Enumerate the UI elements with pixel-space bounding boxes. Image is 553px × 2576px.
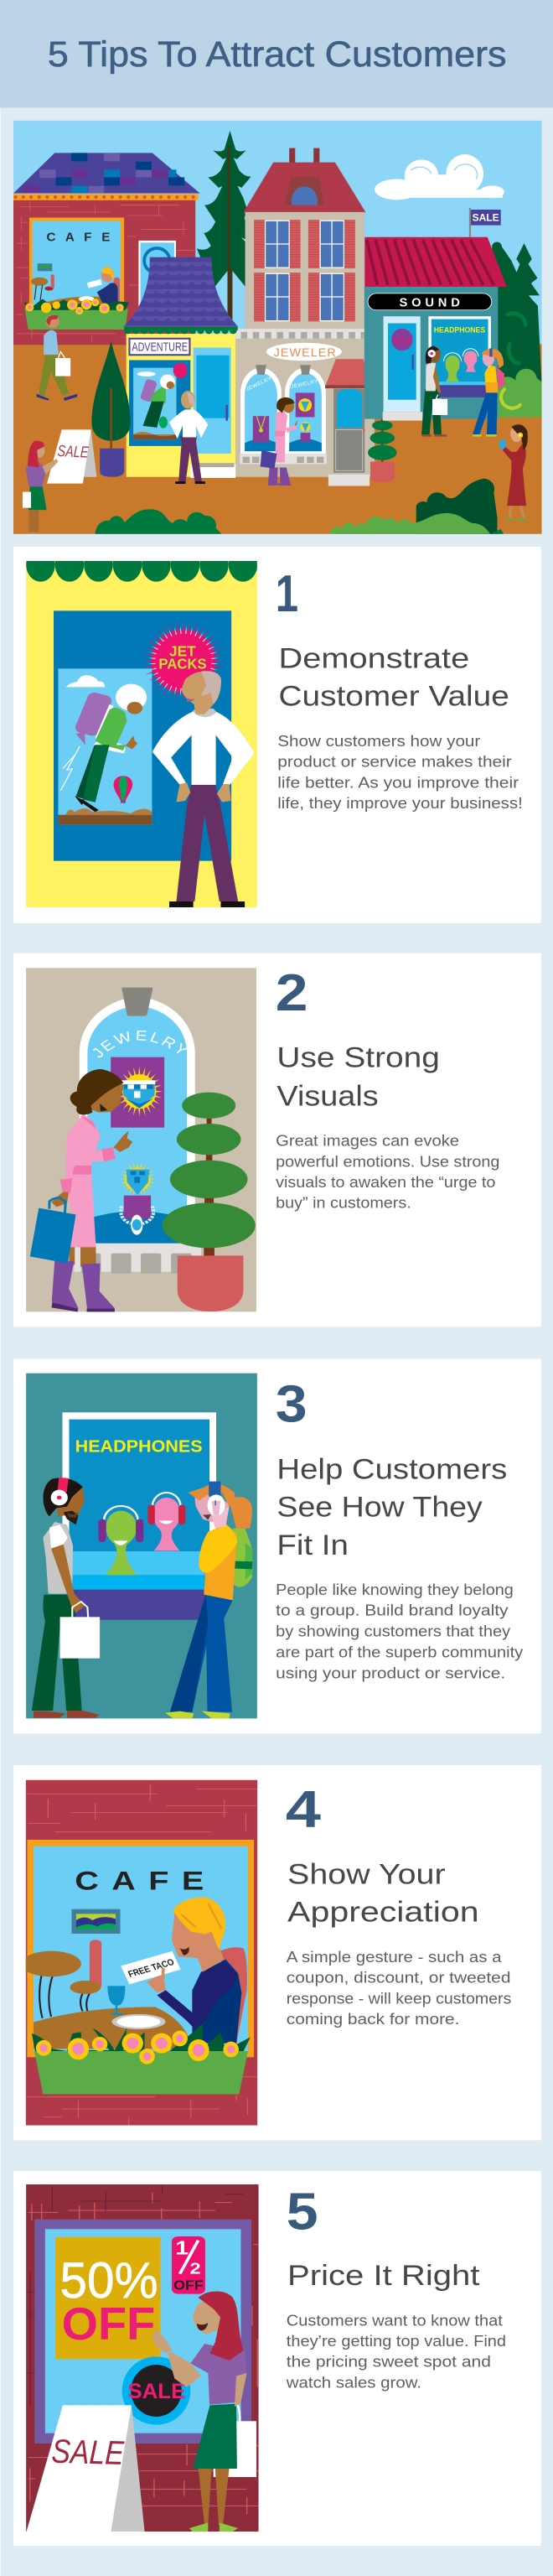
skirt: [193, 2404, 237, 2469]
upper windows: [254, 220, 355, 321]
heading: [276, 1453, 507, 1561]
panel 1: demonstrate customer value: [13, 547, 541, 923]
arm: [51, 1545, 85, 1613]
step number: 5: [287, 2182, 318, 2241]
top: [190, 2344, 247, 2405]
woman in red dress: [499, 424, 528, 521]
heading: Visuals: [276, 1080, 379, 1112]
flowers: [25, 299, 124, 314]
green mannequin: [98, 1506, 143, 1575]
woman in pink: [30, 1069, 132, 1311]
card: [13, 1765, 541, 2140]
table and chairs: [21, 1940, 101, 2018]
chair back: [220, 1947, 247, 2049]
gem burst poster: [116, 1067, 163, 1117]
jeweler storefront: JEWELER: [274, 346, 336, 360]
cafe roof: [13, 153, 200, 193]
body text: Show customers how your: [277, 732, 480, 750]
flag: [469, 208, 501, 237]
body text: [286, 2312, 506, 2392]
red townhouse: [243, 148, 365, 332]
curved jewelry label: JEWELRY: [92, 1030, 187, 1058]
trousers: [176, 784, 238, 901]
blue window: [54, 610, 231, 861]
body text: by showing customers that they: [276, 1623, 510, 1640]
jetpack man: [74, 684, 147, 812]
pink mannequin: [147, 1493, 185, 1550]
body text: buy” in customers.: [276, 1194, 411, 1212]
body text: coupon, discount, or tweeted: [287, 1969, 510, 1987]
window: [428, 316, 491, 384]
bag: [214, 2421, 256, 2477]
framed picture: [71, 1909, 121, 1934]
illustration: adventure window: [26, 548, 257, 907]
diner in window: [87, 267, 120, 306]
body text: life better. As you improve their: [277, 774, 519, 792]
heading: Fit In: [276, 1529, 349, 1561]
body text: People like knowing they belong: [276, 1581, 514, 1598]
man looking at window: [169, 391, 208, 484]
coupon: FREE TACO: [127, 1956, 176, 1980]
window frame: [34, 2220, 251, 2444]
heading: [287, 1858, 479, 1929]
flag: SALE: [473, 212, 499, 224]
body text: A simple gesture - such as a: [287, 1948, 502, 1966]
arched windows: [240, 368, 282, 455]
head: [182, 672, 214, 714]
shop window: [129, 360, 190, 446]
heading: Demonstrate: [279, 642, 469, 675]
adventure sign: [129, 339, 189, 355]
counter: [71, 1551, 208, 1575]
woman in yellow: [473, 348, 504, 437]
shop door: [330, 387, 368, 475]
body text: life, they improve your business!: [277, 794, 523, 812]
standing man: [152, 671, 254, 907]
panel 4: show your appreciation: [13, 1765, 541, 2140]
gold poster: 50%: [60, 2252, 158, 2309]
roof trim: [13, 194, 199, 200]
body text: powerful emotions. Use strong: [276, 1153, 499, 1171]
title: 5 Tips To Attract Customers: [48, 34, 506, 75]
brick lines: [28, 2193, 259, 2514]
a-frame sign: SALE: [51, 2433, 125, 2472]
green awning scallops: [26, 561, 257, 582]
wall picture: [38, 263, 52, 271]
card: [13, 2171, 541, 2546]
table and chairs: [31, 278, 48, 286]
jeweler sign: [266, 343, 342, 361]
sound shop: SOUND: [399, 297, 460, 310]
body text: [277, 732, 523, 812]
adventure shop: [123, 257, 238, 478]
topiary plant: [163, 1093, 256, 1311]
ponytail: [230, 1497, 252, 1529]
gold poster: [55, 2237, 161, 2359]
collar: [192, 709, 217, 717]
foreground table: [34, 2007, 192, 2049]
headphones lettering: HEADPHONES: [75, 1436, 203, 1456]
heading: Help Customers: [276, 1453, 507, 1485]
woman in pink: [261, 397, 298, 486]
gold poster: OFF: [62, 2298, 155, 2350]
sale sign: SALE: [57, 443, 89, 462]
tree: tall pine: [197, 131, 251, 324]
body text: Customers want to know that: [287, 2312, 503, 2329]
circle sale: [122, 2356, 190, 2425]
top: [204, 1524, 237, 1600]
a-frame sign: [27, 2405, 145, 2532]
awning edge: [124, 327, 238, 330]
diner: [121, 1897, 241, 2044]
jewelry labels: JEWELRY: [245, 376, 273, 392]
window jewelry: [253, 416, 269, 442]
poster: [111, 1057, 164, 1128]
legs: [199, 2468, 230, 2526]
arched window: [80, 997, 195, 1247]
cafe building: [13, 153, 200, 345]
window cloud: [137, 371, 156, 377]
cafe lettering: C A F E: [47, 230, 110, 244]
heading: [279, 642, 509, 713]
illustration: headphone shop: [26, 1374, 257, 1718]
starburst badge: JET: [169, 643, 196, 660]
adventure shop: ADVENTURE: [132, 341, 188, 355]
hair: [199, 2291, 243, 2360]
flowers: [36, 2031, 239, 2064]
cloud: [66, 675, 105, 687]
plate: [111, 2014, 165, 2029]
back door of adventure: [138, 241, 176, 310]
illustration: cafe window: [21, 1780, 257, 2126]
brick lines: [27, 1784, 257, 2126]
body text: to a group. Build brand loyalty: [276, 1602, 509, 1619]
window picture: [58, 668, 152, 824]
exhaust lines: [60, 746, 80, 791]
mannequins: [446, 356, 460, 382]
jeans: [170, 1595, 233, 1712]
arm: [168, 2352, 201, 2387]
step number: 1: [276, 564, 298, 622]
shop door: [194, 348, 231, 454]
body text: the pricing sweet spot and: [287, 2353, 491, 2371]
body text: they’re getting top value. Find: [287, 2332, 506, 2350]
walking man: [36, 315, 78, 401]
half off badge: OFF: [173, 2278, 204, 2293]
sound sign: [368, 293, 492, 310]
hands: [176, 782, 190, 802]
starburst badge: PACKS: [158, 656, 207, 673]
sound shop: HEADPHONES: [434, 325, 486, 335]
conical tree: [91, 340, 131, 477]
foliage crescents: [501, 314, 525, 408]
topiary: [368, 411, 397, 482]
balloon: [114, 776, 132, 803]
panel 5: price it right: [13, 2171, 541, 2546]
jetpack figure: [140, 374, 175, 428]
bush right: [498, 369, 542, 417]
man with headphones: [32, 1478, 100, 1718]
head: [90, 1082, 123, 1113]
header band: [0, 0, 553, 108]
section: header and town scene: [0, 0, 553, 534]
card: [13, 547, 541, 923]
body text: [276, 1581, 524, 1682]
trousers: [32, 1595, 82, 1711]
cafe lettering: CAFE: [75, 1866, 204, 1895]
body text: coming back for more.: [287, 2010, 459, 2028]
body text: using your product or service.: [276, 1665, 505, 1682]
body text: visuals to awaken the “urge to: [276, 1173, 495, 1191]
body text: response - will keep customers: [287, 1990, 511, 2007]
brick lines: [16, 201, 194, 342]
lower gem: [120, 1161, 155, 1235]
window: [63, 1412, 216, 1566]
circle sale: SALE: [127, 2380, 185, 2403]
body text: [276, 1132, 499, 1212]
right trees: [492, 242, 542, 386]
ground: [13, 344, 542, 534]
half off badge: 1: [175, 2238, 189, 2259]
illustration: jewelry window: [26, 968, 256, 1311]
card: [13, 1358, 541, 1733]
counter: [437, 382, 488, 385]
panel 3: help customers see how they fit in: [13, 1358, 541, 1734]
planter box: [24, 309, 128, 330]
sound shop: [364, 208, 507, 421]
half off badge: 2: [189, 2260, 201, 2277]
bushes: [96, 479, 504, 534]
cafe window: [29, 218, 124, 313]
man with headphones: [421, 345, 447, 437]
coupon: [121, 1951, 181, 1984]
head: [192, 2298, 225, 2334]
window base: [240, 454, 327, 464]
window base: [74, 1244, 201, 1272]
sky: [13, 121, 542, 534]
heading: Show Your: [287, 1858, 446, 1891]
woman with sign: [23, 441, 58, 532]
body text: product or service makes their: [277, 753, 512, 771]
head: [194, 1490, 230, 1522]
panel 2: use strong visuals: [13, 953, 541, 1327]
jeweler storefront: JEWELRY: [291, 378, 319, 390]
heading: Appreciation: [287, 1896, 479, 1929]
illustration: sale window: [26, 2184, 259, 2532]
body text: watch sales grow.: [286, 2374, 421, 2392]
glass: [107, 1986, 125, 2015]
shirt: [152, 711, 254, 786]
half off badge: [172, 2236, 205, 2294]
heading: Price It Right: [287, 2259, 479, 2292]
town scene: [13, 121, 542, 534]
cloud: [375, 154, 504, 200]
sale sign: [47, 429, 96, 484]
pointing bottom floor: [92, 1212, 187, 1244]
woman in yellow: [165, 1482, 252, 1718]
planter: [32, 2023, 251, 2094]
shirt: [43, 1522, 73, 1594]
sound shop: SALE: [392, 337, 411, 346]
starburst badge: [142, 621, 225, 702]
heading: Use Strong: [276, 1041, 440, 1074]
heading: [276, 1041, 440, 1112]
heading: Customer Value: [279, 680, 509, 713]
body text: Great images can evoke: [276, 1132, 459, 1150]
backpack: [230, 1529, 252, 1587]
left edge strip: [0, 108, 1, 2576]
step number: 4: [286, 1779, 321, 1838]
jeweler storefront: [235, 329, 377, 486]
card: [13, 953, 541, 1327]
bag: [72, 1602, 88, 1618]
window frame: [27, 1840, 254, 2057]
head: [53, 1482, 85, 1516]
woman with red hair: [152, 2291, 256, 2532]
door: [384, 316, 421, 412]
step number: 2: [276, 963, 308, 1021]
step number: 3: [276, 1374, 308, 1433]
heading: See How They: [276, 1491, 483, 1523]
body text: [287, 1948, 511, 2028]
